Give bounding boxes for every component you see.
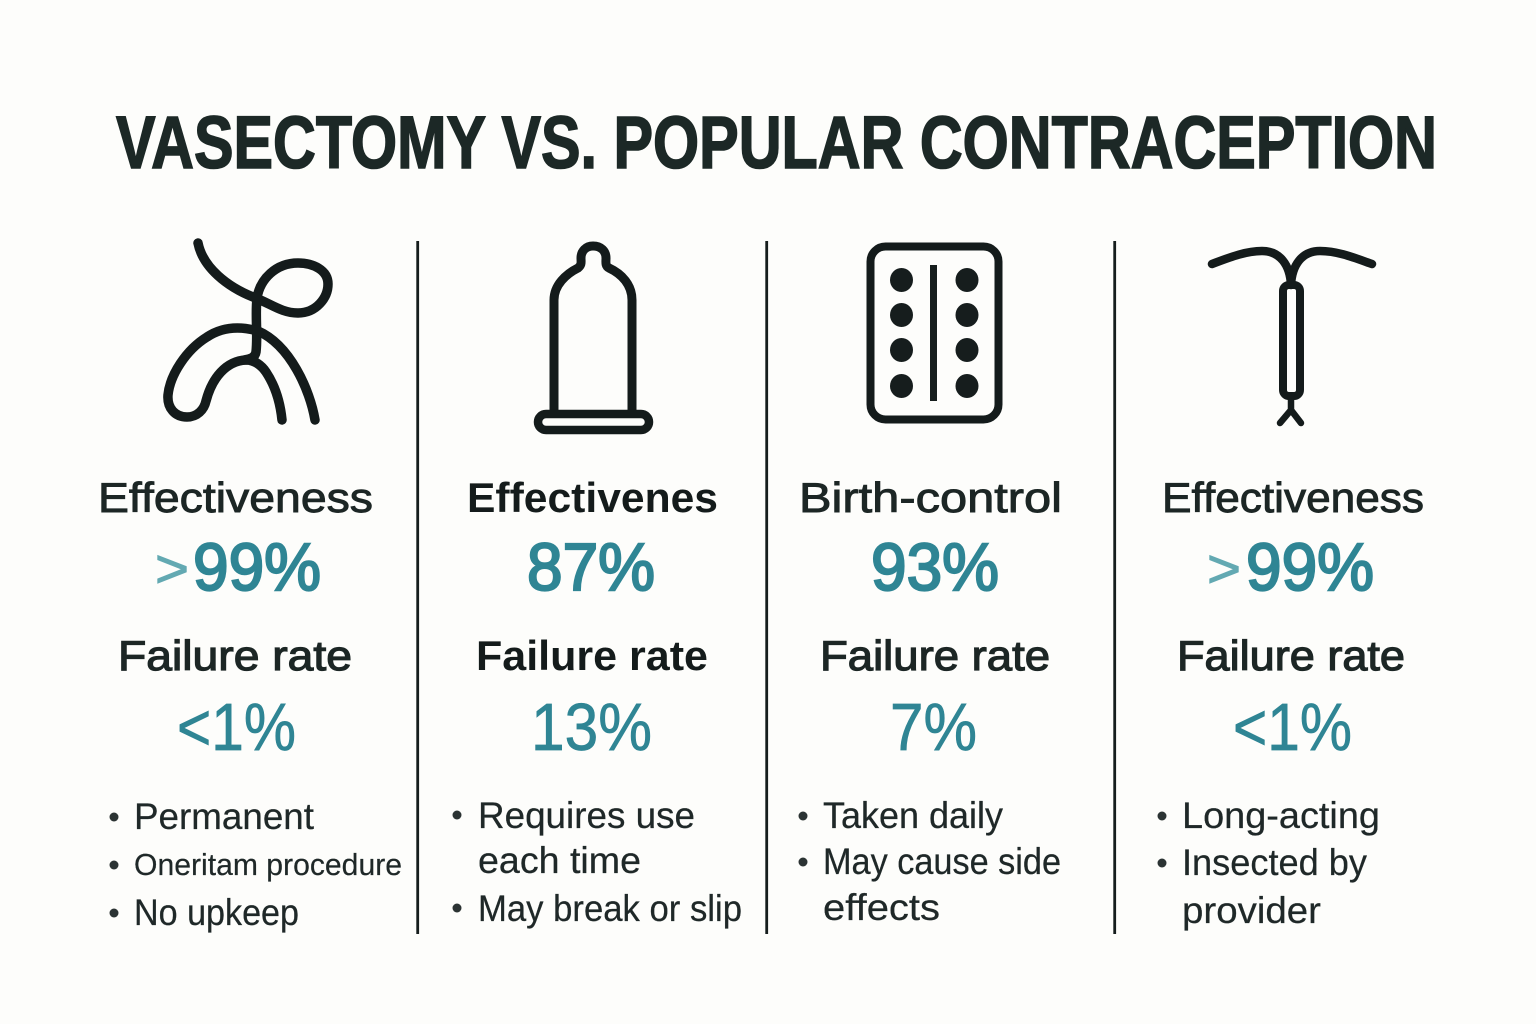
bullet list: [452, 795, 742, 929]
heading: failure rate: Failure rate: [118, 632, 352, 679]
heading: failure rate: Failure rate: [820, 632, 1050, 679]
bullet list: provider: [1182, 890, 1321, 931]
bullet list: Insected by: [1182, 842, 1367, 883]
heading: effectiveness: Effectiveness: [98, 474, 373, 521]
stat: effectiveness value: 87%: [527, 530, 655, 605]
panel: condom: [452, 246, 742, 929]
stat: failure rate value: 13%: [531, 690, 652, 765]
stat: effectiveness value: 99%: [193, 530, 321, 605]
stat: effectiveness value: >: [155, 539, 189, 599]
stat: failure rate value: <1%: [1233, 690, 1352, 765]
bullet list: each time: [478, 840, 641, 881]
bullet list: effects: [823, 887, 940, 928]
bullet list: Permanent: [134, 796, 315, 837]
panel: birth-control pill: [798, 246, 1062, 928]
stat: effectiveness value: >: [1207, 539, 1241, 599]
panel: IUD: [1158, 251, 1424, 931]
icon: IUD: [1212, 251, 1372, 423]
stat: failure rate value: <1%: [177, 690, 296, 765]
bullet list: Long-acting: [1182, 795, 1380, 836]
bullet list: May cause side: [823, 841, 1061, 882]
heading: failure rate: Failure rate: [476, 632, 708, 679]
heading: birth-control: Birth-control: [799, 474, 1062, 521]
stat: failure rate value: 7%: [890, 690, 977, 765]
heading: effectiveness: Effectiveness: [1162, 474, 1424, 521]
bullet list: [1158, 795, 1380, 931]
bullet list: No upkeep: [134, 892, 299, 933]
bullet list: Oneritam procedure: [134, 847, 402, 882]
bullet list: Taken daily: [823, 795, 1003, 836]
heading: effectiveness: Effectivenes: [467, 474, 718, 521]
bullet list: [798, 795, 1061, 928]
icon: pill pack: [870, 246, 998, 420]
heading: failure rate: Failure rate: [1177, 632, 1405, 679]
icon: condom: [538, 246, 649, 430]
bullet list: May break or slip: [478, 888, 742, 929]
stat: effectiveness value: 93%: [871, 530, 999, 605]
bullet list: Requires use: [478, 795, 695, 836]
icon: vas deferens: [168, 243, 328, 420]
bullet list: [110, 796, 402, 933]
panel: vasectomy: [98, 243, 402, 933]
stat: effectiveness value: 99%: [1246, 530, 1374, 605]
